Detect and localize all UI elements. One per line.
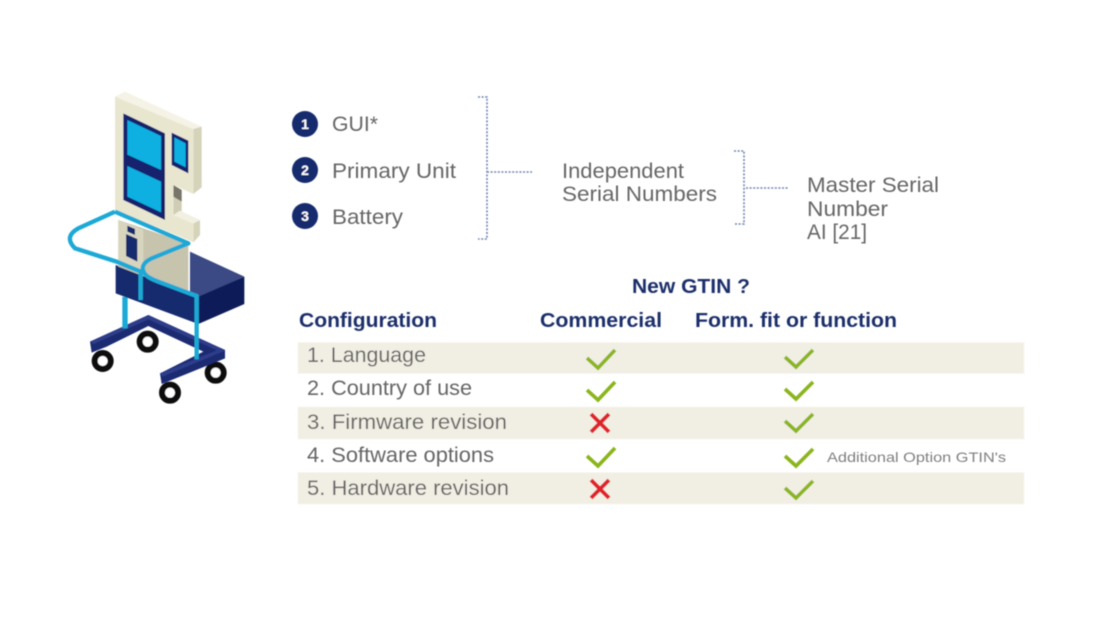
bracket: serial numbers to master serial number <box>734 151 789 224</box>
table column headings: Commercial <box>540 310 662 332</box>
label: independent serial numbers: Independent <box>562 160 684 183</box>
commercial column marks <box>587 350 615 498</box>
table column headings: Configuration <box>299 310 437 332</box>
label: independent serial numbers: Serial Numbers <box>562 183 717 206</box>
table row labels: 3. Firmware revision <box>307 411 507 434</box>
numbered component list: 3 <box>301 208 309 224</box>
numbered component list: Battery <box>332 206 404 229</box>
numbered component list: GUI* <box>332 113 378 136</box>
label: independent serial numbers <box>562 160 717 206</box>
table row labels: 1. Language <box>307 344 426 367</box>
wheels <box>95 334 224 401</box>
battery column <box>118 220 188 293</box>
label: master serial number: Master Serial <box>807 174 939 197</box>
numbered component list: 2 <box>301 162 309 178</box>
label: master serial number: AI [21] <box>807 221 867 244</box>
icon: medical device on cart <box>70 92 244 401</box>
table row labels: 2. Country of use <box>307 377 472 400</box>
handle rail <box>70 212 197 359</box>
table column headings <box>299 310 897 332</box>
table row bands <box>298 342 1024 504</box>
table column headings: Form. fit or function <box>695 310 897 332</box>
base of the cart <box>90 315 225 384</box>
GUI screen unit <box>115 92 202 242</box>
table row labels: 5. Hardware revision <box>307 477 509 500</box>
numbered component list <box>292 111 456 229</box>
table row labels: 4. Software options <box>307 444 494 467</box>
primary unit <box>116 252 244 324</box>
form fit or function column marks <box>785 350 813 498</box>
rear leg <box>117 297 133 328</box>
table heading: New GTIN: New GTIN ? <box>632 276 750 298</box>
numbered component list: Primary Unit <box>332 160 456 183</box>
bracket: components to independent serial numbers <box>478 97 532 239</box>
note: additional option GTINs: Additional Option GTIN's <box>827 449 1006 465</box>
table row labels <box>307 344 509 500</box>
numbered component list: 1 <box>301 116 309 132</box>
label: master serial number: Number <box>807 198 888 221</box>
label: master serial number <box>807 174 939 244</box>
